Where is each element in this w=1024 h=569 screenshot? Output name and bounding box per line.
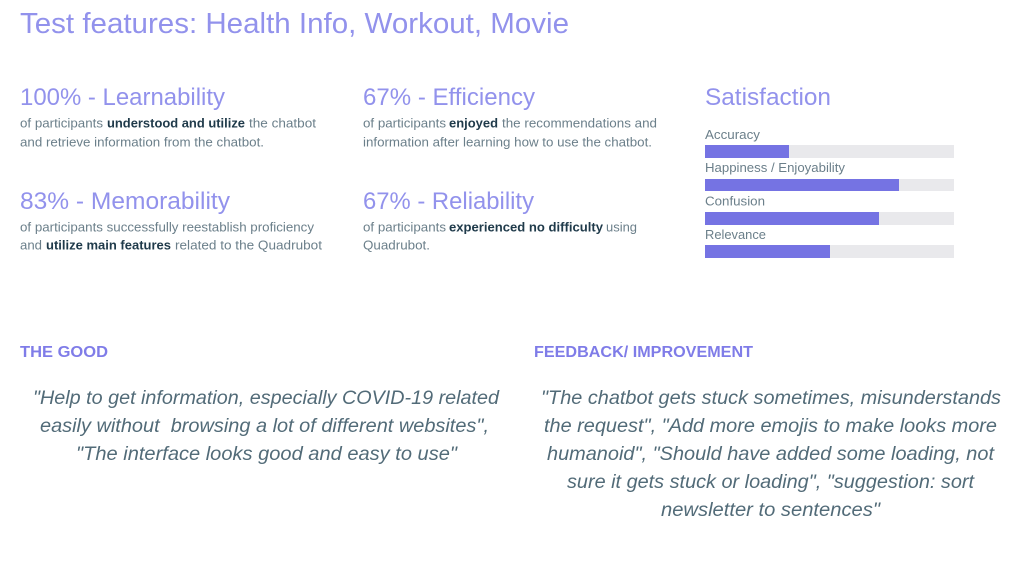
bar: happiness / enjoyability xyxy=(705,160,954,191)
text: learnability description: understood and utilize xyxy=(107,116,245,130)
panel: efficiency xyxy=(363,84,657,150)
bar: relevance: Relevance xyxy=(705,227,766,242)
quote: feedback: "The chatbot gets stuck sometimes, misunderstands xyxy=(541,387,1001,409)
quote: feedback: newsletter to sentences" xyxy=(661,499,881,521)
heading: reliability: 67% - Reliability xyxy=(363,188,534,215)
quote: the good: "Help to get information, especially COVID-19 related xyxy=(33,387,500,409)
heading: satisfaction: Satisfaction xyxy=(705,84,831,111)
text: learnability description: the chatbot xyxy=(249,116,316,130)
heading: feedback / improvement: FEEDBACK/ IMPROVEMENT xyxy=(534,344,754,361)
quote: feedback: humanoid", "Should have added some loading, not xyxy=(547,443,996,465)
panel: learnability xyxy=(20,84,316,150)
heading: learnability: 100% - Learnability xyxy=(20,84,225,111)
text: efficiency description: of participants xyxy=(363,116,447,130)
text: reliability description: experienced no difficulty xyxy=(449,220,604,234)
quote: feedback: the request", "Add more emojis to make looks more xyxy=(544,415,997,437)
quote: the good: easily without browsing a lot of different websites", xyxy=(40,415,489,437)
text: learnability description: of participants xyxy=(20,116,104,130)
text: reliability description: of participants xyxy=(363,220,447,234)
text: efficiency description: the recommendations and xyxy=(502,116,657,130)
panel: memorability xyxy=(20,188,322,252)
bar: accuracy: Accuracy xyxy=(705,127,761,142)
bar: confusion: Confusion xyxy=(705,194,765,208)
heading: efficiency: 67% - Efficiency xyxy=(363,84,535,111)
quote: the good: "The interface looks good and easy to use" xyxy=(76,443,458,465)
text: memorability description: of participants successfully reestablish proficiency xyxy=(20,220,315,234)
quote: feedback: sure it gets stuck or loading", "suggestion: sort xyxy=(567,471,976,493)
text: reliability description: using xyxy=(606,220,637,234)
title: Test features: Health Info, Workout, Movie xyxy=(20,8,569,40)
heading: memorability: 83% - Memorability xyxy=(20,188,230,215)
bar: happiness / enjoyability: Happiness / Enjoyability xyxy=(705,160,845,175)
text: memorability description: utilize main features xyxy=(46,238,171,252)
text: learnability description: and retrieve information from the chatbot. xyxy=(20,134,264,150)
text: memorability description: and xyxy=(20,238,42,252)
panel: satisfaction xyxy=(705,84,954,258)
bar: relevance xyxy=(705,227,954,258)
bar chart: satisfaction xyxy=(705,127,954,258)
text: reliability description: Quadrubot. xyxy=(363,238,430,252)
panel: reliability xyxy=(363,188,637,252)
heading: the good: THE GOOD xyxy=(20,344,108,361)
text: memorability description: related to the Quadrubot xyxy=(175,238,322,252)
panel: feedback / improvement xyxy=(534,344,1001,521)
text: efficiency description: enjoyed xyxy=(449,116,498,130)
bar: accuracy xyxy=(705,127,954,158)
panel: the good xyxy=(20,344,500,465)
text: efficiency description: information after learning how to use the chatbot. xyxy=(363,134,652,150)
bar: confusion xyxy=(705,194,954,225)
